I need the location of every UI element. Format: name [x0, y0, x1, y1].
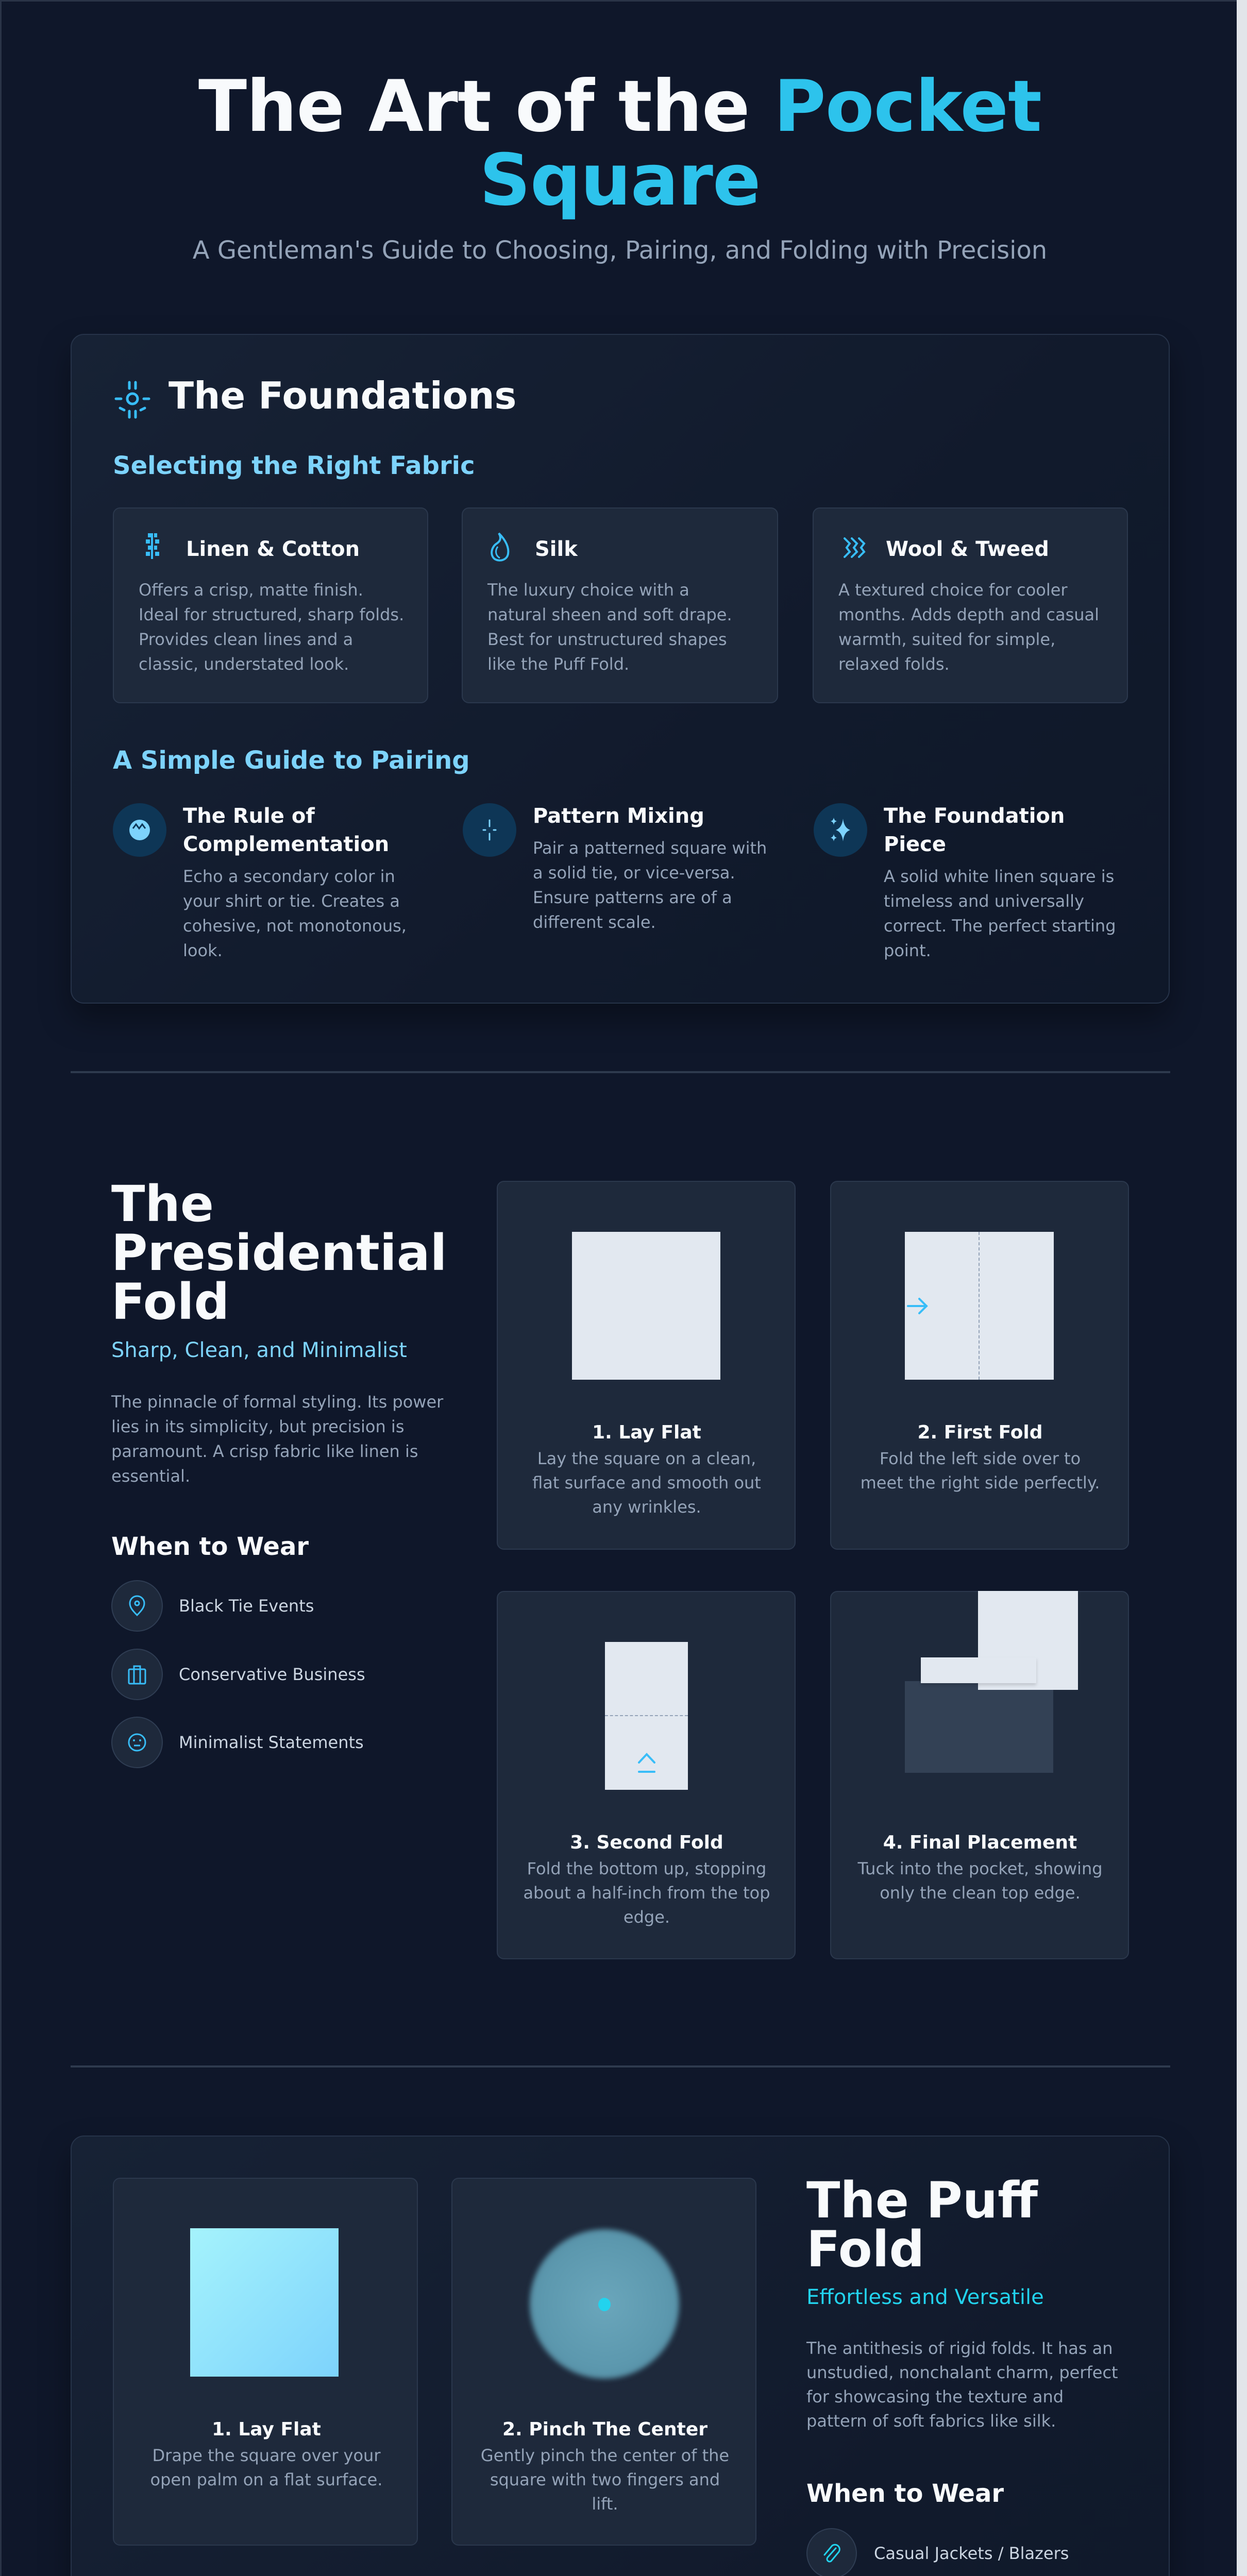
- item body: A solid white linen square is timeless and universally correct. The perfect starting point.: [884, 867, 1116, 960]
- icon: paperclip: [806, 2528, 857, 2576]
- step text: Lay the square on a clean, flat surface and smooth out any wrinkles.: [532, 1449, 761, 1517]
- pairing item: rule of complementation: [113, 803, 407, 960]
- heading: Fold: [111, 1273, 229, 1331]
- step text: [861, 1422, 1100, 1493]
- illustration: pocket with square: [905, 1681, 1053, 1773]
- title: Square: [479, 139, 761, 222]
- card: linen & cotton: [113, 507, 428, 703]
- step text: 1. Lay Flat: [592, 1422, 701, 1443]
- icon: wool: [843, 537, 866, 558]
- card: wool & tweed: [813, 507, 1128, 703]
- illustration: blurred pinched disc: [530, 2229, 679, 2379]
- label: Conservative Business: [179, 1665, 365, 1684]
- step text: Drape the square over your open palm on a flat surface.: [150, 2446, 382, 2489]
- icon: linen: [146, 533, 159, 559]
- title: The Art of the Pocket: [198, 65, 1041, 148]
- illustration: flat square: [572, 1232, 720, 1380]
- subtitle: Effortless and Versatile: [806, 2285, 1044, 2309]
- heading: when to wear: When to Wear: [111, 1532, 309, 1561]
- step text: [150, 2419, 382, 2489]
- step card: presidential 2 first fold: [830, 1181, 1129, 1550]
- step card: puff 2 pinch center: [451, 2178, 756, 2546]
- step text: 1. Lay Flat: [212, 2419, 321, 2440]
- step card: puff 1 lay flat: [113, 2178, 418, 2546]
- label: Minimalist Statements: [179, 1733, 364, 1752]
- heading: when to wear: When to Wear: [806, 2479, 1004, 2508]
- illustration: square with fold line and arrow: [905, 1232, 1054, 1380]
- item title: The Rule of Complementation: [183, 804, 389, 856]
- panel: puff fold: [71, 2136, 1170, 2576]
- step text: Fold the bottom up, stopping about a half-inch from the top edge.: [523, 1859, 770, 1927]
- description: The pinnacle of formal styling. Its power lies in its simplicity, but precision is paramount. A crisp fabric like linen is essential.: [111, 1392, 443, 1486]
- step text: 3. Second Fold: [570, 1832, 723, 1853]
- icon: sparkle small: [463, 803, 516, 857]
- heading: The: [111, 1175, 214, 1233]
- item body: Echo a secondary color in your shirt or tie. Creates a cohesive, not monotonous, look.: [183, 867, 407, 960]
- heading: the foundations: The Foundations: [168, 374, 516, 417]
- step text: Tuck into the pocket, showing only the clean top edge.: [857, 1859, 1103, 1903]
- subheading: selecting fabric: Selecting the Right Fabric: [113, 451, 475, 480]
- icon: sparkles: [814, 803, 867, 857]
- step text: Gently pinch the center of the square with two fingers and lift.: [481, 2446, 729, 2514]
- icon: foundations: [114, 381, 150, 418]
- card body: Offers a crisp, matte finish. Ideal for structured, sharp folds. Provides clean lines and a classic, understated look.: [139, 580, 404, 674]
- card title: Wool & Tweed: [886, 537, 1049, 561]
- step text: 4. Final Placement: [883, 1832, 1077, 1853]
- illustration: half rectangle folding up: [605, 1642, 688, 1790]
- subheading: pairing guide: A Simple Guide to Pairing: [113, 746, 470, 775]
- card body: A textured choice for cooler months. Adds depth and casual warmth, suited for simple, relaxed folds.: [838, 580, 1099, 674]
- list item: conservative business: [111, 1649, 365, 1700]
- pairing item: pattern mixing: [463, 803, 767, 932]
- icon: palette: [113, 803, 166, 857]
- heading: the puff fold: [806, 2172, 1038, 2278]
- step card: presidential 1 lay flat: [497, 1181, 796, 1550]
- heading: Presidential: [111, 1224, 447, 1282]
- pairing item: foundation piece: [814, 803, 1116, 960]
- heading: the puff fold: Fold: [806, 2221, 924, 2278]
- step text: 2. First Fold: [917, 1422, 1043, 1443]
- list item: casual jackets: [806, 2528, 1069, 2576]
- step card: presidential 3 second fold: [497, 1591, 796, 1959]
- illustration: gradient square: [190, 2228, 339, 2377]
- icon: pin: [111, 1580, 163, 1632]
- step text: 2. Pinch The Center: [502, 2419, 707, 2440]
- icon: neutral face: [111, 1717, 163, 1768]
- item title: Pattern Mixing: [533, 804, 704, 828]
- step text: [857, 1832, 1103, 1903]
- step card: presidential 4 final placement: [830, 1591, 1129, 1959]
- subtitle: A Gentleman's Guide to Choosing, Pairing, and Folding with Precision: [193, 236, 1047, 265]
- list item: minimalist statements: [111, 1717, 364, 1768]
- heading: [111, 1175, 447, 1331]
- heading: the puff fold: The Puff: [806, 2172, 1038, 2229]
- description: The antithesis of rigid folds. It has an unstudied, nonchalant charm, perfect for showcasing the texture and pattern of soft fabrics like silk.: [806, 2338, 1118, 2431]
- panel: foundations: [71, 334, 1170, 1004]
- card title: Silk: [535, 537, 578, 561]
- label: Casual Jackets / Blazers: [874, 2544, 1069, 2563]
- card: silk: [462, 507, 778, 703]
- subtitle: Sharp, Clean, and Minimalist: [111, 1338, 407, 1362]
- section: presidential fold intro: [111, 1175, 447, 1768]
- step text: Fold the left side over to meet the right side perfectly.: [861, 1449, 1100, 1493]
- icon: silk drop: [491, 533, 509, 562]
- card title: Linen & Cotton: [186, 537, 360, 561]
- label: Black Tie Events: [179, 1596, 314, 1616]
- card body: The luxury choice with a natural sheen and soft drape. Best for unstructured shapes like the Puff Fold.: [487, 580, 732, 674]
- list item: black tie: [111, 1580, 314, 1632]
- item body: Pair a patterned square with a solid tie, or vice-versa. Ensure patterns are of a different scale.: [533, 838, 767, 932]
- icon: briefcase: [111, 1649, 163, 1700]
- title: [198, 65, 1041, 222]
- item title: The Foundation Piece: [884, 804, 1065, 856]
